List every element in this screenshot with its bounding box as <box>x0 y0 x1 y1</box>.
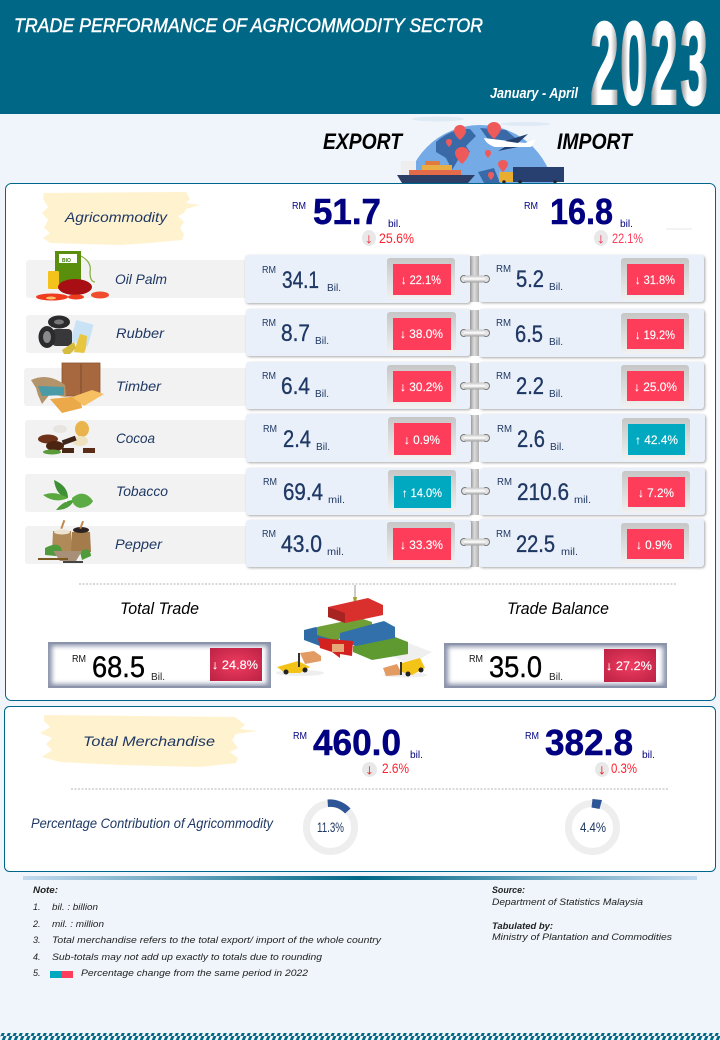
oil palm import card: 5.2 <box>516 266 544 293</box>
connector rings between export and import cards <box>460 276 490 546</box>
legend swatch <box>50 971 73 978</box>
pepper export card: ↓ 33.3% <box>400 538 443 552</box>
center binding column <box>470 256 479 567</box>
icon: cocoa <box>38 421 95 454</box>
notes: 3. <box>33 935 41 945</box>
right forklift <box>383 658 427 678</box>
export and import headings: EXPORT <box>323 129 403 154</box>
oil palm export card: RM <box>262 265 276 276</box>
cocoa export card: 2.4 <box>283 426 311 453</box>
green container middle <box>317 618 372 640</box>
export merchandise total: bil. <box>410 750 423 761</box>
tobacco import card: RM <box>497 477 512 488</box>
trade balance: Bil. <box>549 672 563 683</box>
trade balance: ↓ 27.2% <box>606 659 652 673</box>
source: Ministry of Plantation and Commodities <box>492 932 673 942</box>
year <box>590 0 708 130</box>
tobacco import card: ↓ 7.2% <box>638 486 674 500</box>
timber export card: 6.4 <box>281 373 310 400</box>
trade balance <box>444 599 667 688</box>
period: January - April <box>490 85 579 102</box>
export total: 25.6% <box>379 230 414 246</box>
tobacco export card: RM <box>263 477 277 488</box>
export and import headings <box>323 129 633 154</box>
export merchandise total <box>293 722 423 777</box>
cocoa import card: ↑ 42.4% <box>635 433 678 447</box>
icon: oil palm <box>36 251 109 300</box>
icon: pepper <box>38 520 91 563</box>
export total <box>292 191 414 246</box>
source: Source: <box>492 885 525 895</box>
notes: Percentage change from the same period in 2022 <box>81 968 308 978</box>
oil palm export card <box>245 255 470 303</box>
pepper export card <box>246 520 471 567</box>
notes: bil. : billion <box>52 902 98 912</box>
import merchandise total: 382.8 <box>545 722 633 763</box>
left forklift <box>276 651 324 676</box>
import total: 22.1% <box>612 230 643 246</box>
rubber import card <box>479 309 704 357</box>
notes: mil. : million <box>52 919 104 929</box>
export merchandise total: 2.6% <box>382 760 409 776</box>
oil palm import card: ↓ 31.8% <box>635 273 675 287</box>
truck <box>499 167 564 184</box>
export total: bil. <box>388 219 401 230</box>
donut chart: import 4.4% <box>568 799 616 852</box>
source: Department of Statistics Malaysia <box>492 897 643 907</box>
tobacco import card: mil. <box>574 494 591 506</box>
open red container <box>318 638 353 658</box>
oil palm import card <box>479 255 704 302</box>
row: pepper: Pepper <box>115 536 163 552</box>
row: rubber: Rubber <box>116 325 165 341</box>
rubber export card: ↓ 38.0% <box>400 327 443 341</box>
tobacco export card: ↑ 14.0% <box>402 486 442 500</box>
icon: tobacco <box>43 480 93 510</box>
oil palm import card: Bil. <box>549 281 563 293</box>
notes: Sub-totals may not add up exactly to totals due to rounding <box>52 952 322 962</box>
import merchandise total: RM <box>525 731 539 742</box>
blue container right <box>340 621 395 646</box>
row: tobacco <box>25 474 248 512</box>
row: tobacco: Tobacco <box>116 483 168 499</box>
agricommodity heading: Agricommodity <box>64 209 168 225</box>
row: timber: Timber <box>116 378 162 394</box>
icon: timber <box>31 363 104 413</box>
source <box>492 885 673 942</box>
export total: ↓ <box>364 230 374 246</box>
import total: RM <box>524 201 538 212</box>
year: 2 <box>590 0 619 130</box>
notes: 5. <box>33 968 41 978</box>
notes: 4. <box>33 952 41 962</box>
row: cocoa: Cocoa <box>116 430 155 446</box>
source: Tabulated by: <box>492 921 553 931</box>
notes <box>32 885 382 978</box>
timber import card: ↓ 25.0% <box>634 380 677 394</box>
ship <box>397 161 475 183</box>
rubber import card: 6.5 <box>515 321 543 348</box>
cocoa export card <box>246 414 471 462</box>
tobacco import card <box>480 468 705 515</box>
pepper import card: ↓ 0.9% <box>636 538 672 552</box>
row: cocoa <box>25 420 248 458</box>
rubber export card: 8.7 <box>281 320 310 347</box>
footer divider <box>23 876 697 880</box>
cocoa export card: ↓ 0.9% <box>404 433 440 447</box>
icon: globe with ship, plane and truck <box>397 116 564 183</box>
oil palm import card: RM <box>496 264 511 275</box>
total trade: 68.5 <box>92 651 145 684</box>
rubber export card <box>246 309 470 356</box>
icon: shipping containers and forklifts <box>276 585 432 678</box>
pepper export card: RM <box>262 529 276 540</box>
total trade: Total Trade <box>120 599 199 618</box>
export total: 51.7 <box>313 191 381 232</box>
pepper import card: mil. <box>561 546 578 558</box>
cocoa export card: RM <box>263 424 277 435</box>
blue container left <box>304 627 340 646</box>
donut chart: export 11.3% <box>306 799 354 852</box>
bottom stripe band <box>0 1033 720 1040</box>
trade balance: Trade Balance <box>507 599 609 618</box>
cocoa import card: Bil. <box>550 441 564 453</box>
notes: 2. <box>32 919 41 929</box>
trade balance: 35.0 <box>489 651 542 684</box>
pepper import card: RM <box>496 529 511 540</box>
timber export card <box>246 362 470 409</box>
row: rubber <box>26 315 248 354</box>
tobacco export card <box>246 468 471 515</box>
pepper import card <box>479 519 704 567</box>
import merchandise total: bil. <box>642 750 655 761</box>
panel: total merchandise <box>4 706 716 872</box>
year: 2 <box>650 0 678 130</box>
pepper export card: mil. <box>327 546 344 558</box>
rubber import card: ↓ 19.2% <box>635 328 675 342</box>
tobacco export card: mil. <box>328 494 345 506</box>
cocoa import card: RM <box>497 424 512 435</box>
header banner <box>0 0 720 130</box>
pepper export card: 43.0 <box>281 531 322 558</box>
row: pepper <box>25 520 248 564</box>
notes: Total merchandise refers to the total export/ import of the whole country <box>52 935 382 945</box>
green container lower right <box>353 637 408 660</box>
total merchandise heading: Total Merchandise <box>83 733 215 749</box>
year: 0 <box>620 0 648 130</box>
red container top <box>328 598 383 623</box>
row: oil palm: Oil Palm <box>115 271 167 287</box>
timber import card: RM <box>496 371 511 382</box>
total trade: ↓ 24.8% <box>212 658 258 672</box>
total merchandise heading <box>40 715 258 767</box>
timber export card: RM <box>262 371 276 382</box>
agricommodity heading <box>42 192 200 245</box>
oil palm export card: ↓ 22.1% <box>401 273 441 287</box>
donut chart: export 11.3%: 11.3% <box>317 819 344 835</box>
rubber import card: RM <box>496 318 511 329</box>
export merchandise total: 460.0 <box>313 722 401 763</box>
timber export card: ↓ 30.2% <box>400 380 443 394</box>
total trade <box>48 599 271 688</box>
donut chart: import 4.4%: 4.4% <box>580 819 606 835</box>
export merchandise total: ↓ <box>365 761 374 777</box>
tobacco import card: 210.6 <box>517 479 569 506</box>
timber import card: 2.2 <box>516 373 544 400</box>
plane <box>484 134 536 151</box>
import merchandise total: ↓ <box>598 761 606 777</box>
icon: oil palm: BIO <box>62 258 71 264</box>
import total: bil. <box>620 219 633 230</box>
total trade: Bil. <box>151 672 165 683</box>
icon: rubber <box>38 316 94 354</box>
import total: ↓ <box>596 230 606 246</box>
percentage contribution label: Percentage Contribution of Agricommodity <box>31 815 274 831</box>
rubber export card: Bil. <box>315 335 329 347</box>
total trade: RM <box>72 654 86 665</box>
export and import headings: IMPORT <box>557 129 633 154</box>
panel: agricommodity <box>6 184 716 700</box>
title: TRADE PERFORMANCE OF AGRICOMMODITY SECTOR <box>14 16 483 37</box>
trade balance: RM <box>469 654 483 665</box>
oil palm export card: 34.1 <box>282 267 319 294</box>
cocoa import card <box>480 414 705 462</box>
oil palm export card: Bil. <box>327 282 341 294</box>
import total <box>524 191 692 246</box>
timber import card <box>479 362 704 409</box>
cocoa export card: Bil. <box>316 441 330 453</box>
cocoa import card: 2.6 <box>517 426 545 453</box>
export merchandise total: RM <box>293 731 307 742</box>
notes: Note: <box>33 885 58 895</box>
rubber export card: RM <box>262 318 276 329</box>
timber import card: Bil. <box>549 388 563 400</box>
row: oil palm <box>26 251 248 300</box>
import merchandise total <box>525 722 655 777</box>
pepper import card: 22.5 <box>516 531 555 558</box>
import merchandise total: 0.3% <box>611 760 637 776</box>
timber export card: Bil. <box>315 388 329 400</box>
tobacco export card: 69.4 <box>283 479 323 506</box>
row: timber <box>24 363 248 413</box>
rubber import card: Bil. <box>549 336 563 348</box>
notes: 1. <box>33 902 41 912</box>
import total: 16.8 <box>550 191 613 232</box>
export total: RM <box>292 201 306 212</box>
